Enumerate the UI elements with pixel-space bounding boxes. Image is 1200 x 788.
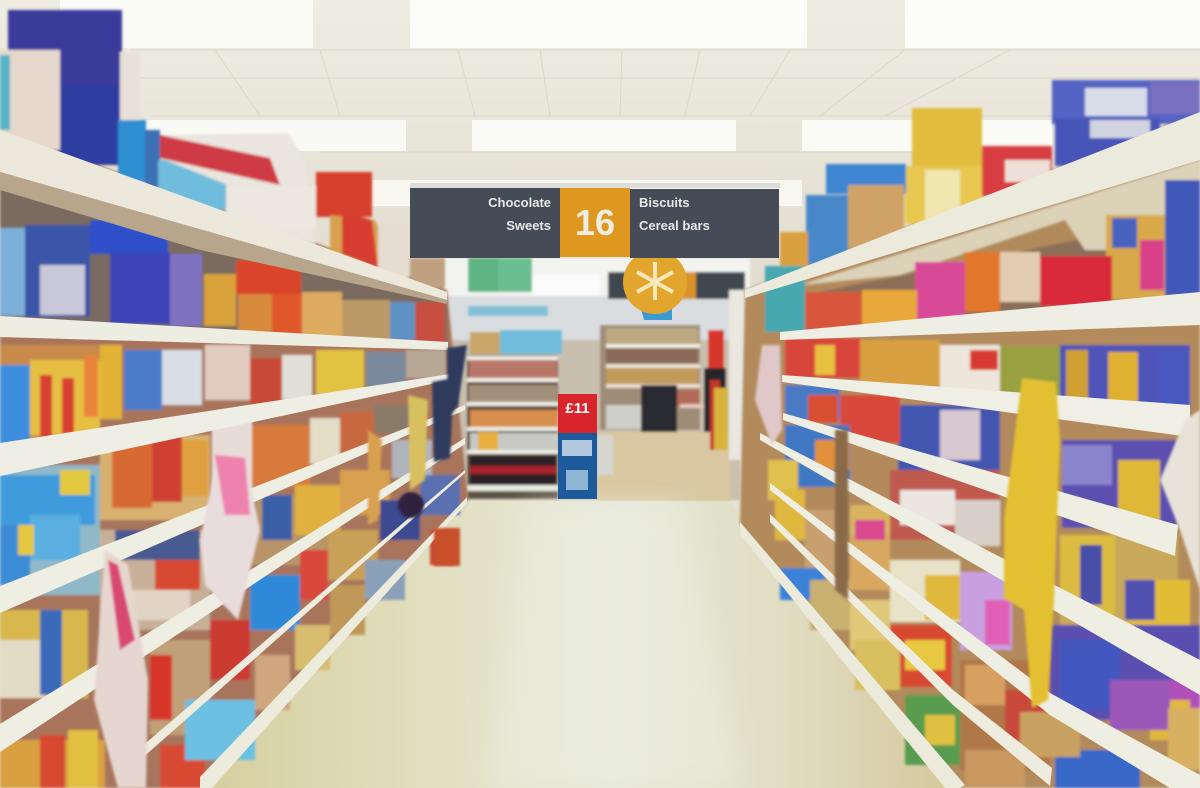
bauble [623,250,687,320]
right shelves [740,112,1200,788]
label chocolate: Chocolate [488,195,551,210]
label biscuits: Biscuits [639,195,690,210]
dark distant sign [608,272,745,299]
11 pound offer display: £11 [565,400,590,417]
sign panel left [410,188,560,258]
11 pound offer display [558,394,597,499]
aisle number: 16 [575,202,615,243]
row 1 [0,220,445,344]
under top shelf shade [780,215,1200,335]
under top shelf shade [0,180,447,345]
row 2 [0,345,446,455]
ceiling [0,0,1200,300]
hanging strip merchandise left [94,345,467,788]
floor [205,501,948,788]
left shelves [0,130,467,788]
sign panel right [630,189,779,258]
right base [740,112,1200,788]
row 5 [150,475,460,735]
bottom row [780,568,1200,788]
row 3 [0,405,424,595]
top stock boxes [780,80,1200,280]
floor reflection [490,501,740,788]
top stock boxes [0,10,445,288]
trolley [641,385,677,439]
row 4 [0,440,432,698]
aisle sign [410,183,780,258]
row 4 [768,425,1190,635]
small crates [597,435,613,475]
row 2 [785,338,1190,410]
top goods on far shelf [468,306,562,354]
far shelving unit [467,355,558,499]
left base [0,130,468,788]
green signs [468,258,532,292]
row 3 [785,385,1177,528]
aisle number block [560,188,630,257]
bottom row [0,530,455,788]
yellow hanging strip right [755,345,1200,708]
ceiling lights [60,0,1200,206]
white pillar [729,290,751,460]
left shelf products [0,10,468,788]
label sweets: Sweets [506,218,551,233]
right shelf products [740,80,1200,788]
distant shelving [600,325,726,448]
row 1 [765,180,1200,332]
label cereal bars: Cereal bars [639,218,710,233]
far end of store [440,258,751,502]
far aisle floor [597,432,730,502]
row 5 [775,490,1200,740]
red display [710,380,720,450]
